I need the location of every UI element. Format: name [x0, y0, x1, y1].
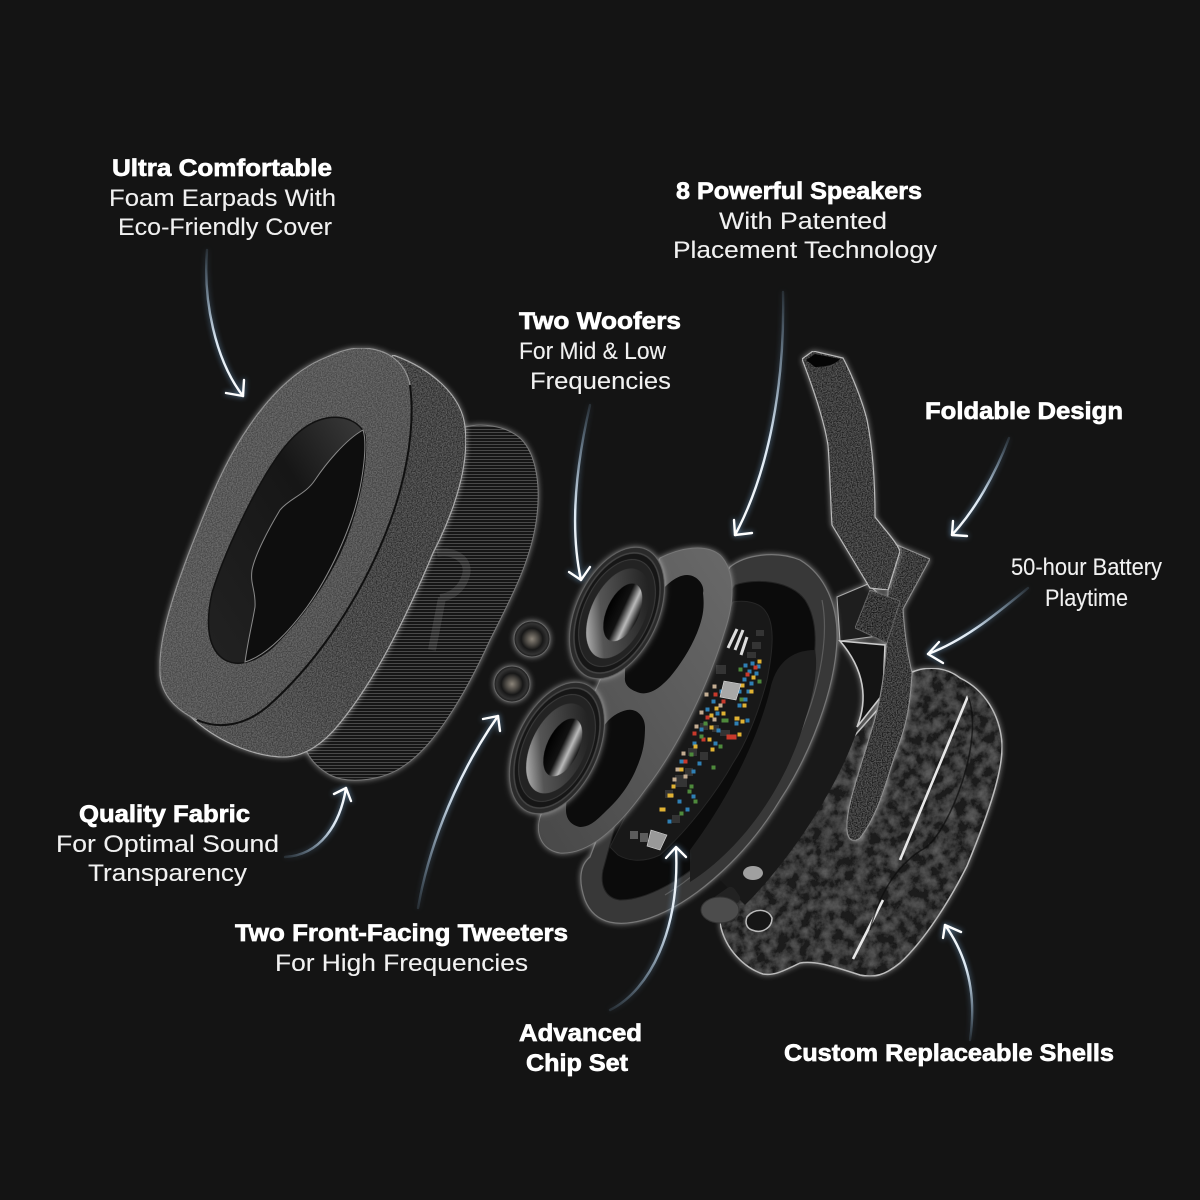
label: battery: [1011, 554, 1162, 612]
label: powerful speakers: 8 Powerful Speakers: [676, 178, 922, 205]
earpad opening: [245, 430, 365, 662]
driver dome inside ring: [690, 650, 816, 882]
arrow: foldable: [952, 438, 1009, 536]
label: tweeters: [235, 920, 568, 977]
label: powerful speakers: With Patented: [719, 208, 887, 235]
label: two woofers: Frequencies: [530, 368, 671, 395]
main chip: [720, 681, 741, 700]
label: ultra comfortable: [109, 155, 336, 241]
woofer lower: [490, 667, 624, 829]
label: powerful speakers: [673, 178, 937, 264]
label: powerful speakers: Placement Technology: [673, 237, 937, 264]
label: two woofers: [519, 308, 681, 395]
arrow: chip set: [610, 847, 686, 1010]
woofer upper: [550, 532, 684, 694]
label: ultra comfortable: Ultra Comfortable: [112, 155, 332, 182]
label: battery: 50-hour Battery: [1011, 554, 1162, 581]
headband: [802, 351, 900, 590]
label: chip set: Advanced: [519, 1020, 642, 1047]
speaker plate: [538, 548, 732, 853]
ear cup shell: [720, 668, 1002, 976]
mounting ring: [581, 555, 837, 923]
label: foldable design: Foldable Design: [925, 398, 1123, 425]
inner cup dome: [720, 640, 866, 905]
yoke and hinge: [837, 542, 930, 840]
label: tweeters: Two Front-Facing Tweeters: [235, 920, 568, 947]
label: chip set: Chip Set: [526, 1050, 628, 1077]
control dial and buttons: [701, 866, 772, 931]
label: tweeters: For High Frequencies: [275, 950, 528, 977]
arrow: battery: [928, 588, 1028, 663]
lower chip: [647, 830, 667, 850]
label: two woofers: Two Woofers: [519, 308, 681, 335]
label: ultra comfortable: Foam Earpads With: [109, 185, 336, 212]
label: two woofers: For Mid & Low: [519, 338, 667, 365]
fabric disc: [305, 425, 538, 780]
label: ultra comfortable: Eco-Friendly Cover: [118, 214, 332, 241]
label: replaceable shells: Custom Replaceable Shells: [784, 1040, 1114, 1067]
label: battery: Playtime: [1045, 585, 1128, 612]
label: quality fabric: Transparency: [88, 860, 247, 887]
label: quality fabric: [56, 801, 279, 887]
label: quality fabric: For Optimal Sound: [56, 831, 279, 858]
label: quality fabric: Quality Fabric: [79, 801, 250, 828]
arrow: foam earpads: [206, 250, 244, 396]
shell slits: [853, 696, 968, 959]
circuit board with chips: [610, 601, 772, 860]
arrow: speakers: [734, 292, 783, 535]
arrow: fabric: [285, 788, 351, 857]
arrow: tweeters: [418, 716, 500, 908]
foam earpad: [160, 348, 466, 757]
label: chip set: [519, 1020, 642, 1077]
arrow: shells: [943, 925, 972, 1040]
tweeters: [494, 621, 550, 702]
arrow: woofers: [569, 405, 590, 580]
